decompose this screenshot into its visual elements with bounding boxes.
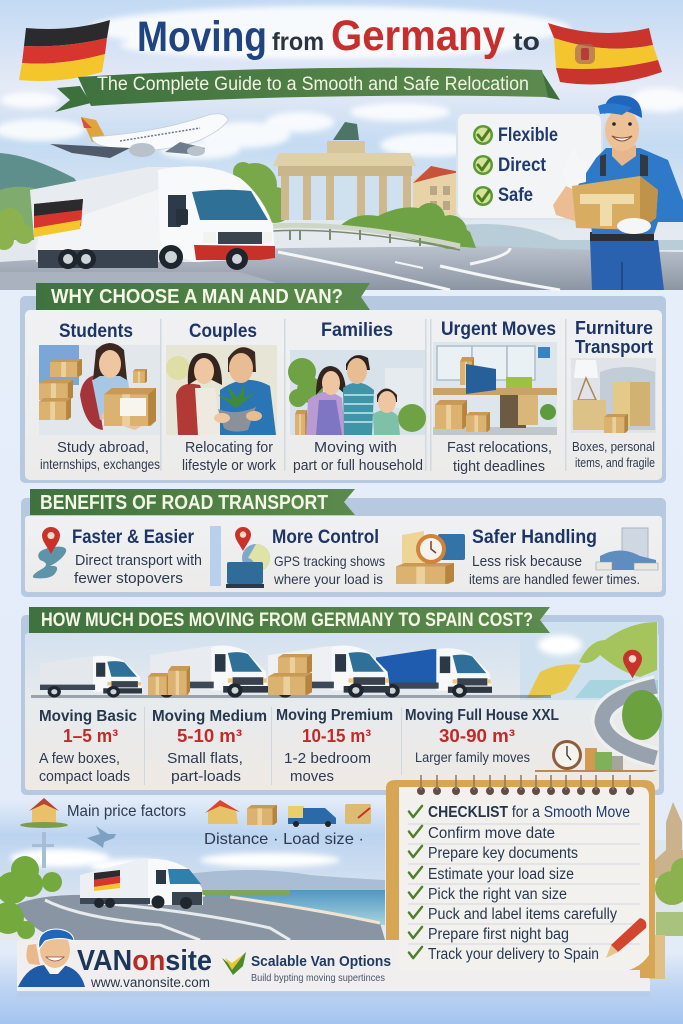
icon: price factor icons <box>205 800 371 827</box>
benefit: more control: More Control <box>272 527 379 548</box>
footer band <box>17 929 650 997</box>
benefit: safer handling: items are handled fewer times. <box>469 571 640 587</box>
moving truck with German flag <box>30 166 275 270</box>
benefit: more control <box>226 527 385 588</box>
students illustration <box>39 343 160 435</box>
card: furniture transport: Transport <box>575 337 653 357</box>
benefit: safer handling: Safer Handling <box>472 527 597 548</box>
plan: premium: 1-2 bedroom <box>284 750 371 767</box>
benefit: faster and easier: Faster & Easier <box>72 527 195 548</box>
card: furniture transport <box>571 318 656 470</box>
card: families: Moving with <box>314 439 397 456</box>
plan: medium: Small flats, <box>167 750 243 767</box>
card: furniture transport: Furniture <box>575 318 653 338</box>
card: urgent moves <box>433 319 557 475</box>
plan: full house: Moving Full House XXL <box>405 707 559 724</box>
logo: www.vanonsite.com <box>90 975 210 990</box>
panel: benefits checks <box>457 113 602 219</box>
checklist item 2: Prepare key documents <box>428 845 578 862</box>
panel: why choose a man and van <box>20 283 666 483</box>
title <box>137 12 540 61</box>
spiral rings <box>417 787 634 795</box>
icon: clock and books <box>535 740 658 772</box>
mascot <box>18 929 85 987</box>
section header: WHY CHOOSE A MAN AND VAN? <box>51 286 343 308</box>
icon: clock and boxes <box>396 531 465 584</box>
icon: house <box>20 798 68 828</box>
Brandenburg Gate <box>273 122 416 220</box>
checklist item 3: Estimate your load size <box>428 866 574 883</box>
card: students: Students <box>59 321 133 342</box>
hero scene <box>0 0 683 290</box>
title: Moving <box>137 13 267 61</box>
van: medium <box>148 646 268 698</box>
plan: full house <box>405 707 559 765</box>
trees left <box>0 208 34 250</box>
benefit: more control: GPS tracking shows <box>274 553 385 569</box>
plan: medium <box>152 708 267 785</box>
card: furniture transport: Boxes, personal <box>572 439 655 454</box>
card: couples <box>166 321 277 474</box>
main price factors <box>20 798 371 848</box>
plan: basic: Moving Basic <box>39 708 137 725</box>
German flag <box>19 20 110 81</box>
urgent moves illustration <box>433 342 557 435</box>
furniture illustration <box>571 358 656 433</box>
van: premium <box>268 646 390 698</box>
plan: basic: A few boxes, <box>39 750 120 767</box>
logo <box>77 945 212 990</box>
main price factors: Distance · Load size · <box>204 831 364 848</box>
road and map scene <box>520 622 662 758</box>
card: students <box>39 321 160 472</box>
checklist item 6: Prepare first night bag <box>428 926 569 943</box>
card: families: part or full household <box>293 457 423 474</box>
clouds <box>0 6 683 159</box>
plan: premium: moves <box>290 768 334 785</box>
check: safe: Safe <box>498 185 533 206</box>
plan: medium: Moving Medium <box>152 708 267 725</box>
benefit: faster and easier: Direct transport with <box>75 552 202 569</box>
card: couples: Couples <box>189 321 257 342</box>
plan: basic <box>39 708 137 785</box>
benefit: faster and easier: fewer stopovers <box>74 570 183 587</box>
section header: BENEFITS OF ROAD TRANSPORT <box>40 492 328 514</box>
check: flexible: Flexible <box>498 125 558 146</box>
benefit: faster and easier <box>33 527 202 587</box>
icon: sofa and mirror <box>596 528 658 570</box>
road <box>0 246 683 290</box>
checklist item 4: Pick the right van size <box>428 886 567 903</box>
right side scene <box>655 802 683 936</box>
card: families <box>288 320 426 474</box>
card: families: Families <box>321 320 393 341</box>
lower truck <box>80 858 203 909</box>
townhouse and greenery <box>340 166 476 249</box>
plan: full house: Larger family moves <box>415 749 530 765</box>
plan: full house: 30-90 m³ <box>439 726 515 746</box>
panel: benefits of road transport <box>21 489 666 597</box>
subtitle ribbon: The Complete Guide to a Smooth and Safe Relocation <box>97 74 529 95</box>
card: urgent moves: Fast relocations, <box>447 439 552 456</box>
card: students: internships, exchanges <box>40 456 160 472</box>
card: urgent moves: tight deadlines <box>453 458 545 475</box>
scalable van options <box>222 952 391 984</box>
plan: basic: compact loads <box>39 768 130 785</box>
check: safe <box>473 185 533 206</box>
mover with box <box>553 95 683 290</box>
checklist item 5: Puck and label items carefully <box>428 906 617 923</box>
check: flexible <box>473 125 558 146</box>
plan: premium <box>276 707 393 785</box>
families illustration <box>288 350 426 435</box>
scalable van options: Scalable Van Options <box>251 953 391 970</box>
logo: VANonsite <box>77 945 212 977</box>
subtitle ribbon <box>55 68 560 112</box>
plan: premium: 10-15 m³ <box>302 726 371 746</box>
trees behind gate <box>233 162 293 223</box>
hills <box>0 153 120 240</box>
scalable van options: Build bypting moving supertinces <box>251 973 385 984</box>
title: Germany <box>331 12 505 60</box>
check: direct: Direct <box>498 155 547 176</box>
card: furniture transport: items, and fragile <box>575 455 655 470</box>
main price factors: Main price factors <box>67 803 186 820</box>
section header: HOW MUCH DOES MOVING FROM GERMANY TO SPAIN COST? <box>41 609 533 631</box>
overpass railing <box>273 225 460 250</box>
checklist heading: CHECKLIST for a Smooth Move <box>428 804 630 821</box>
check: direct <box>473 155 547 176</box>
icon: gps laptop <box>226 527 270 588</box>
icon: small plane <box>87 826 116 848</box>
plan: premium: Moving Premium <box>276 707 393 724</box>
airplane <box>50 114 228 158</box>
card: couples: Relocating for <box>185 439 273 456</box>
card: students: Study abroad, <box>57 439 149 456</box>
title: from <box>272 28 324 56</box>
checklist notepad <box>386 775 665 979</box>
plan: medium: part-loads <box>171 768 241 785</box>
couples illustration <box>166 345 277 435</box>
benefit: more control: where your load is <box>273 571 383 587</box>
plan: basic: 1–5 m³ <box>63 726 118 746</box>
checklist item 7: Track your delivery to Spain <box>428 946 599 963</box>
panel: moving cost <box>21 607 664 795</box>
icon: route pin <box>33 527 66 578</box>
checklist item 1: Confirm move date <box>428 825 555 842</box>
lower road scene <box>0 800 385 940</box>
card: urgent moves: Urgent Moves <box>441 319 556 340</box>
benefit: safer handling <box>396 527 658 587</box>
plan: medium: 5-10 m³ <box>177 726 242 746</box>
card: couples: lifestyle or work <box>182 457 276 474</box>
van: basic <box>40 656 142 697</box>
vans row <box>31 646 551 698</box>
title: to <box>513 28 540 56</box>
icon: pencil <box>606 918 646 958</box>
van: full house <box>376 648 492 698</box>
benefit: safer handling: Less risk because <box>472 553 582 570</box>
Spanish flag <box>548 23 662 84</box>
